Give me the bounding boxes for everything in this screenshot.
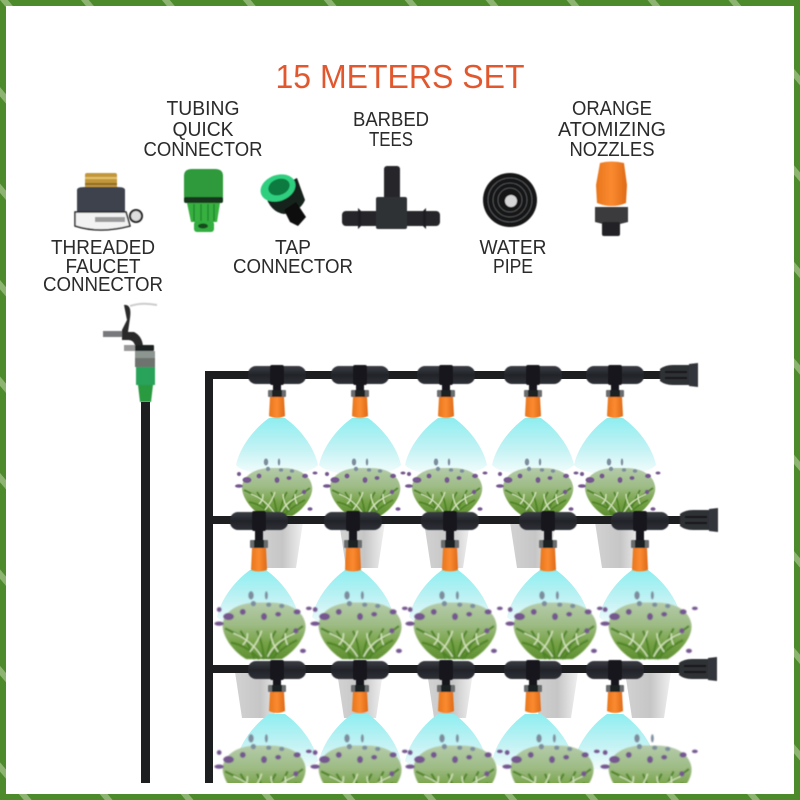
pipe row 1	[205, 363, 698, 387]
label: water pipe	[480, 237, 546, 278]
label: threaded faucet connector: FAUCET	[66, 256, 140, 278]
label: orange atomizing nozzles: NOZZLES	[570, 139, 654, 161]
label: orange atomizing nozzles	[558, 98, 666, 161]
icon: threaded faucet connector	[75, 173, 142, 230]
label: water pipe: WATER	[480, 237, 546, 259]
label: tap connector: CONNECTOR	[233, 256, 353, 278]
frame pipe vertical	[205, 371, 213, 783]
pipe row 3	[213, 657, 717, 681]
main water pipe from faucet	[141, 402, 150, 783]
icon: tap connector	[257, 170, 306, 226]
title: 15 METERS SET	[276, 58, 524, 95]
label: tubing quick connector: QUICK	[172, 119, 234, 141]
icon: barbed tee	[342, 166, 440, 229]
label: orange atomizing nozzles: ATOMIZING	[558, 119, 666, 141]
sprays, row 2	[217, 570, 681, 627]
label: tubing quick connector: TUBING	[166, 98, 240, 120]
label: barbed tees: BARBED	[353, 109, 429, 131]
label: barbed tees	[353, 109, 429, 151]
icon: tubing quick connector	[184, 169, 223, 232]
label: threaded faucet connector	[43, 237, 163, 296]
label: tap connector	[233, 237, 353, 278]
label: tubing quick connector	[144, 98, 262, 161]
tees and nozzles, row 1	[248, 365, 644, 418]
pots, row 2	[235, 672, 671, 718]
label: water pipe: PIPE	[493, 256, 533, 278]
tees and nozzles, row 2	[230, 511, 669, 572]
label: threaded faucet connector: THREADED	[51, 237, 155, 259]
label: tap connector: TAP	[275, 237, 311, 259]
label: orange atomizing nozzles: ORANGE	[572, 98, 652, 120]
icon: orange atomizing nozzle	[595, 162, 628, 236]
label: barbed tees: TEES	[369, 129, 413, 151]
plants, row 3	[214, 734, 699, 783]
pipe row 2	[213, 508, 718, 532]
icon: coiled water pipe	[483, 173, 537, 227]
pots, row 1	[257, 522, 641, 568]
sprays, row 3	[236, 714, 656, 771]
icon: faucet with connector	[103, 304, 157, 402]
plants, row 2	[214, 591, 698, 659]
label: threaded faucet connector: CONNECTOR	[43, 274, 163, 296]
tees and nozzles, row 3	[248, 660, 644, 713]
plants, row 1	[235, 458, 660, 516]
sprays, row 1	[236, 418, 656, 475]
label: tubing quick connector: CONNECTOR	[144, 139, 262, 161]
